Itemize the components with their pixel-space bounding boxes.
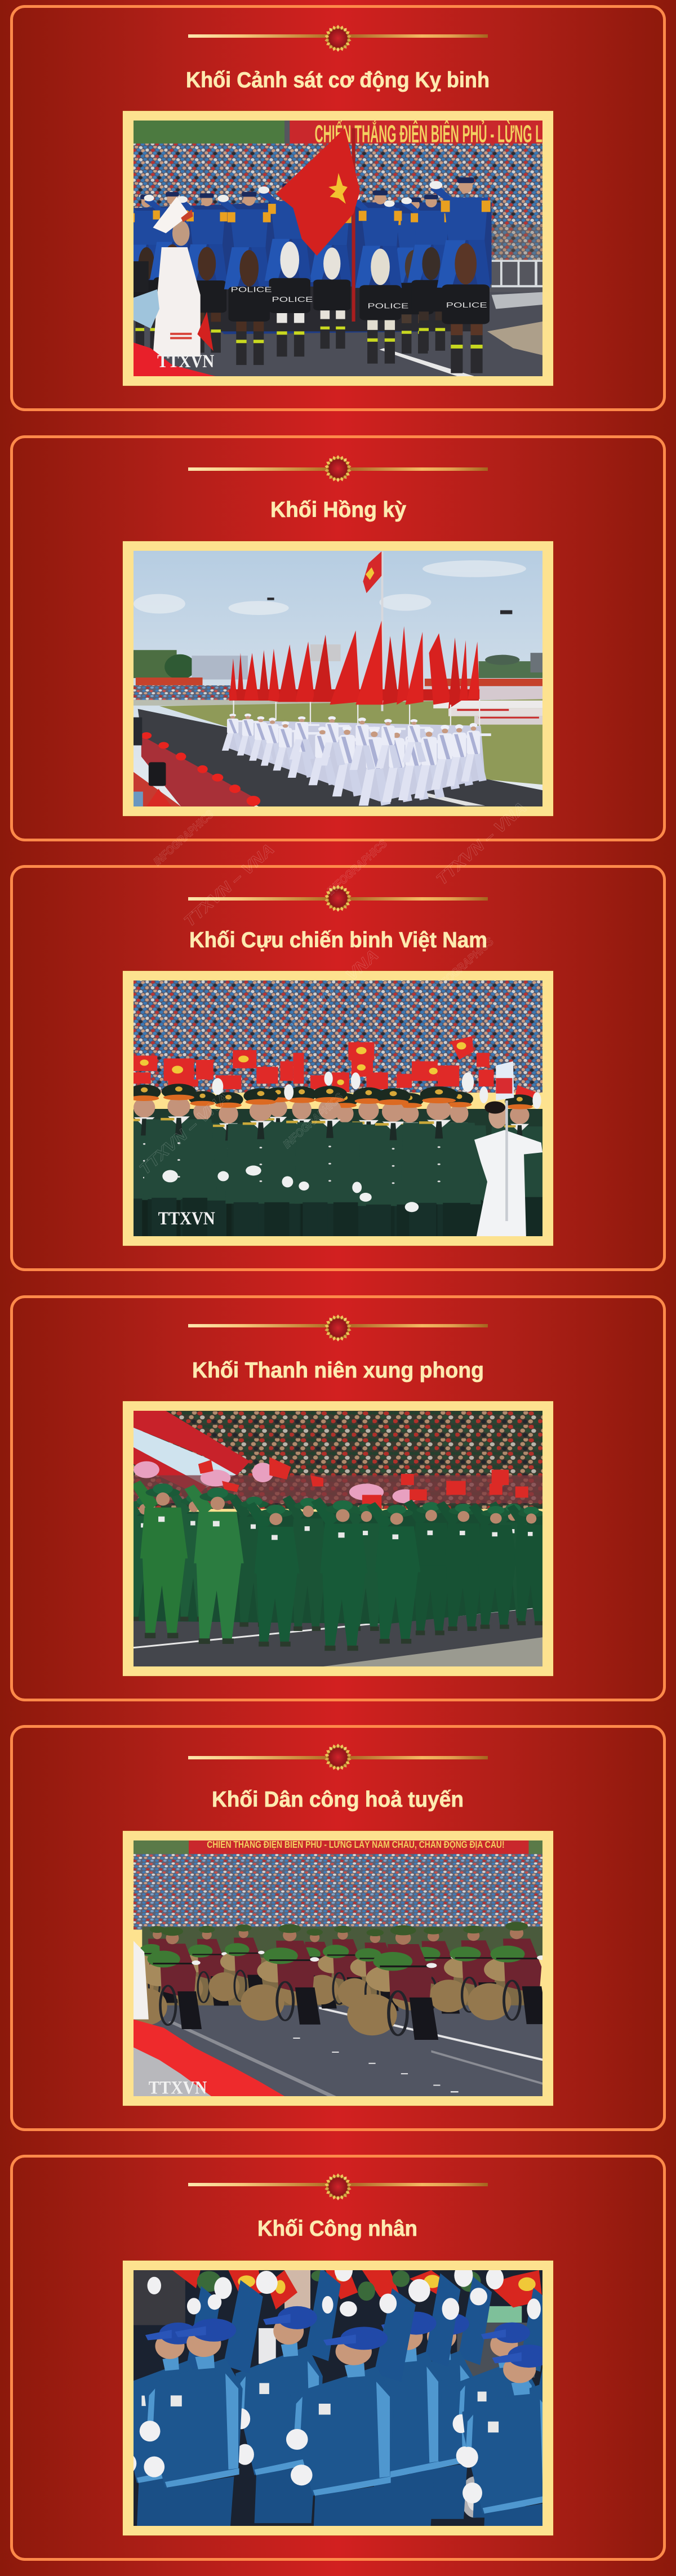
heading: Khối Dân công hoả tuyến <box>212 1788 464 1812</box>
riders: POLICE <box>446 301 487 309</box>
road <box>134 2002 542 2096</box>
uniform mass <box>134 1109 542 1236</box>
watermark text: INFOGRAPHICS <box>325 837 390 898</box>
watermark text: TTXVN – VNA <box>136 1088 233 1178</box>
divider bar <box>188 467 488 471</box>
heading: Khối Thanh niên xung phong <box>192 1358 484 1383</box>
icon: gold emblem <box>324 1744 352 1771</box>
crowd <box>134 981 542 1093</box>
photo: veterans <box>134 981 542 1236</box>
officer and flowers <box>134 1941 284 2096</box>
sign and woman in white <box>474 1061 542 1236</box>
photo: workers in blue <box>134 2270 542 2525</box>
banner <box>290 119 542 155</box>
fence <box>492 260 542 287</box>
waved flags <box>134 1036 539 1100</box>
watermark text: TTXVN – VNA <box>180 840 278 930</box>
flags at top <box>172 2270 542 2310</box>
panel: Khối Công nhân <box>10 2155 666 2561</box>
heading: Khối Công nhân <box>257 2217 417 2241</box>
marchers <box>222 699 491 805</box>
divider bar <box>188 1756 488 1759</box>
icon: gold emblem <box>324 2173 352 2201</box>
heading: Khối Cảnh sát cơ động Kỵ binh <box>186 68 490 92</box>
foliage <box>197 2270 481 2301</box>
right formation <box>433 700 542 724</box>
watermark text: TTXVN – VNA <box>433 799 530 888</box>
more raised gloves <box>148 2271 541 2320</box>
pole and flag <box>363 551 383 711</box>
divider bar <box>188 34 488 37</box>
panel: Khối Cảnh sát cơ động Kỵ binh <box>10 5 666 411</box>
marchers in green <box>120 1480 550 1651</box>
green backdrop behind marchers <box>136 1512 542 1624</box>
crowd <box>134 1853 542 1929</box>
red flags <box>229 620 479 708</box>
flag <box>276 128 360 321</box>
divider bar <box>188 897 488 901</box>
heading: Khối Hồng kỳ <box>270 498 406 522</box>
riders <box>119 177 491 373</box>
watermark text: INFOGRAPHICS <box>152 808 216 868</box>
icon: gold emblem <box>324 1314 352 1342</box>
photo frame <box>123 1830 553 2105</box>
panel: Khối Dân công hoả tuyến <box>10 1725 666 2131</box>
drones <box>267 598 512 614</box>
photo: youth volunteers <box>134 1411 542 1666</box>
photo: mounted police <box>134 121 542 376</box>
divider bar <box>188 1324 488 1327</box>
TTXVN logo: TTXVN <box>158 1209 215 1229</box>
distant town <box>134 644 542 679</box>
riders: POLICE <box>231 286 272 293</box>
road <box>138 708 542 806</box>
photo frame <box>123 971 553 1246</box>
red flowers <box>134 342 216 376</box>
rider mass backdrop <box>134 202 492 334</box>
grass <box>159 699 542 785</box>
photo frame <box>123 1401 553 1676</box>
porters with bicycles <box>124 1922 548 2040</box>
soldiers <box>110 1084 553 1271</box>
TTXVN logo: TTXVN <box>157 351 214 371</box>
photo: red flag formation <box>134 551 542 806</box>
watermark text: TTXVN – VNA <box>284 946 382 1036</box>
officer in white <box>134 197 214 356</box>
icon: gold emblem <box>324 25 352 52</box>
stadium crowds <box>134 685 230 699</box>
flags and flowers band <box>134 1457 542 1510</box>
divider bar <box>188 2183 488 2186</box>
icon: gold emblem <box>324 455 352 482</box>
white gloves <box>162 1072 541 1212</box>
green band behind porters <box>142 1927 544 1959</box>
icon: gold emblem <box>324 885 352 912</box>
panel: Khối Cựu chiến binh Việt Nam <box>10 865 666 1271</box>
watermark text: INFOGRAPHICS <box>432 935 496 996</box>
photo frame <box>123 110 553 385</box>
road <box>134 1593 542 1666</box>
workers <box>115 2258 589 2561</box>
crowd <box>134 143 542 261</box>
heading: Khối Cựu chiến binh Việt Nam <box>189 928 487 952</box>
banner <box>189 1838 528 1856</box>
photo frame <box>123 2261 553 2535</box>
photo frame <box>123 541 553 815</box>
fence with red flowers <box>134 717 260 806</box>
riders: POLICE <box>272 295 313 304</box>
panel: Khối Thanh niên xung phong <box>10 1295 666 1701</box>
panel: Khối Hồng kỳ <box>10 435 666 841</box>
watermark text: INFOGRAPHICS <box>281 1091 346 1151</box>
stand crowd <box>134 1410 542 1509</box>
drapes <box>134 1410 250 1495</box>
riders: POLICE <box>367 301 408 310</box>
photo: frontline civilian porters <box>134 1840 542 2096</box>
road <box>134 292 542 376</box>
